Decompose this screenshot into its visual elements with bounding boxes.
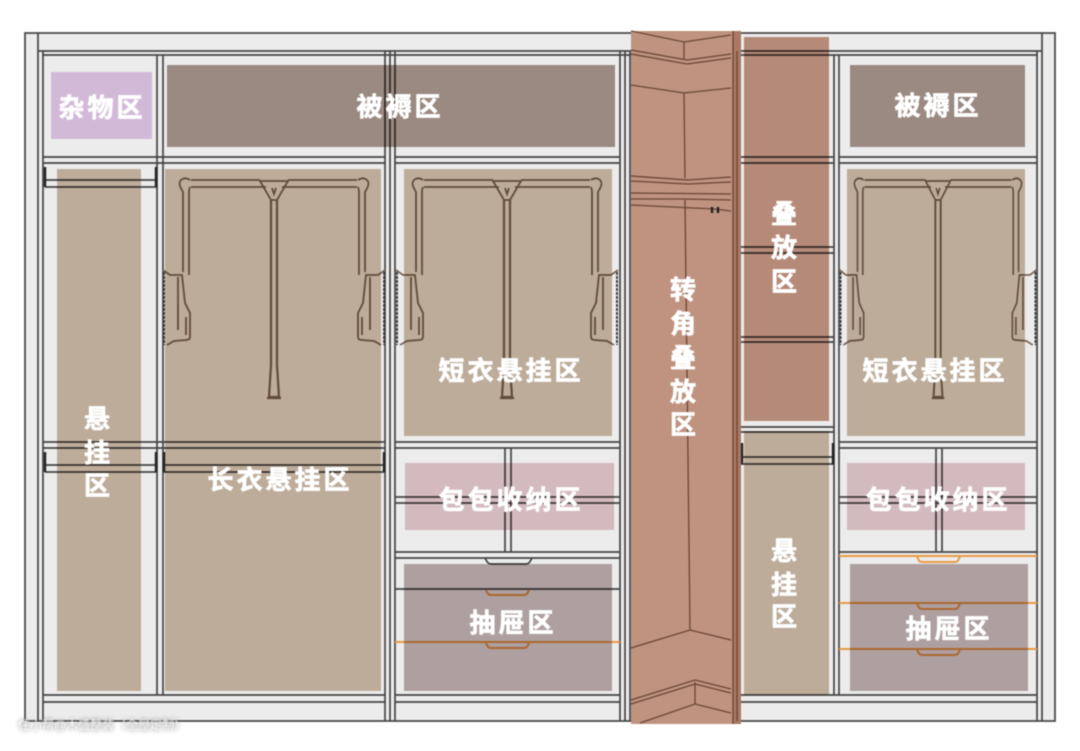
panel: corner stacking zone: [631, 31, 741, 724]
panel: long clothes hanging zone: 长衣悬挂区: [207, 465, 353, 495]
panel: drawer zone right: 抽屉区: [905, 614, 993, 644]
panel: bedding zone large: 被褥区: [356, 92, 444, 122]
panel: bedding zone right: [850, 65, 1025, 147]
panel: corner stacking zone: 转: [670, 275, 696, 305]
pull-down rack: short hanging right: [840, 178, 1036, 398]
panel: short clothes hanging zone right: [847, 169, 1025, 436]
panel: hanging zone right column: 悬: [771, 536, 797, 566]
panel: short clothes hanging zone right: 短衣悬挂区: [862, 356, 1008, 386]
panel: hanging zone right column: 挂: [771, 570, 797, 600]
pull-down rack: short hanging middle: [396, 178, 618, 398]
hanging rods: [45, 167, 834, 472]
panel: corner stacking zone: 角: [670, 309, 696, 339]
panel: short clothes hanging zone middle: 短衣悬挂区: [438, 356, 584, 386]
panel: corner stacking zone: 区: [670, 410, 696, 440]
panel: drawer zone middle: 抽屉区: [469, 608, 557, 638]
panel: corner stacking zone: 叠: [670, 343, 696, 373]
panel: long clothes hanging zone: [165, 169, 381, 691]
panel: left hanging zone: [57, 169, 141, 691]
panel: drawer zone middle: [404, 564, 612, 691]
panel: bedding zone large: [167, 65, 615, 147]
panel: bedding zone right: 被褥区: [894, 91, 982, 121]
panel: left hanging zone: 区: [84, 471, 110, 501]
pull-down rack: long hanging: [163, 178, 385, 398]
panel: bag storage zone middle: [405, 463, 614, 530]
panel: bag storage zone middle: 包包收纳区: [438, 485, 584, 515]
panel: stacking zone right column: [744, 37, 829, 421]
panel: bag storage zone right: [847, 463, 1025, 530]
panel: hanging zone right column: [744, 431, 829, 695]
panel: left hanging zone: 挂: [84, 438, 110, 468]
panel: drawer zone right: [850, 564, 1028, 691]
panel: stacking zone right column: 放: [771, 233, 797, 263]
panel: short clothes hanging zone middle: [404, 169, 612, 436]
panel: sundries zone: [51, 72, 152, 139]
panel: stacking zone right column: 区: [771, 267, 797, 297]
panel: stacking zone right column: 叠: [771, 199, 797, 229]
panel: hanging zone right column: 区: [771, 602, 797, 632]
panel: sundries zone: 杂物区: [58, 93, 146, 123]
watermark: 住小帮@木盛整装（全屋定制）: [18, 717, 186, 732]
panel: bag storage zone right: 包包收纳区: [865, 485, 1011, 515]
panel: left hanging zone: 悬: [84, 404, 110, 434]
panel: corner stacking zone: 放: [670, 377, 696, 407]
